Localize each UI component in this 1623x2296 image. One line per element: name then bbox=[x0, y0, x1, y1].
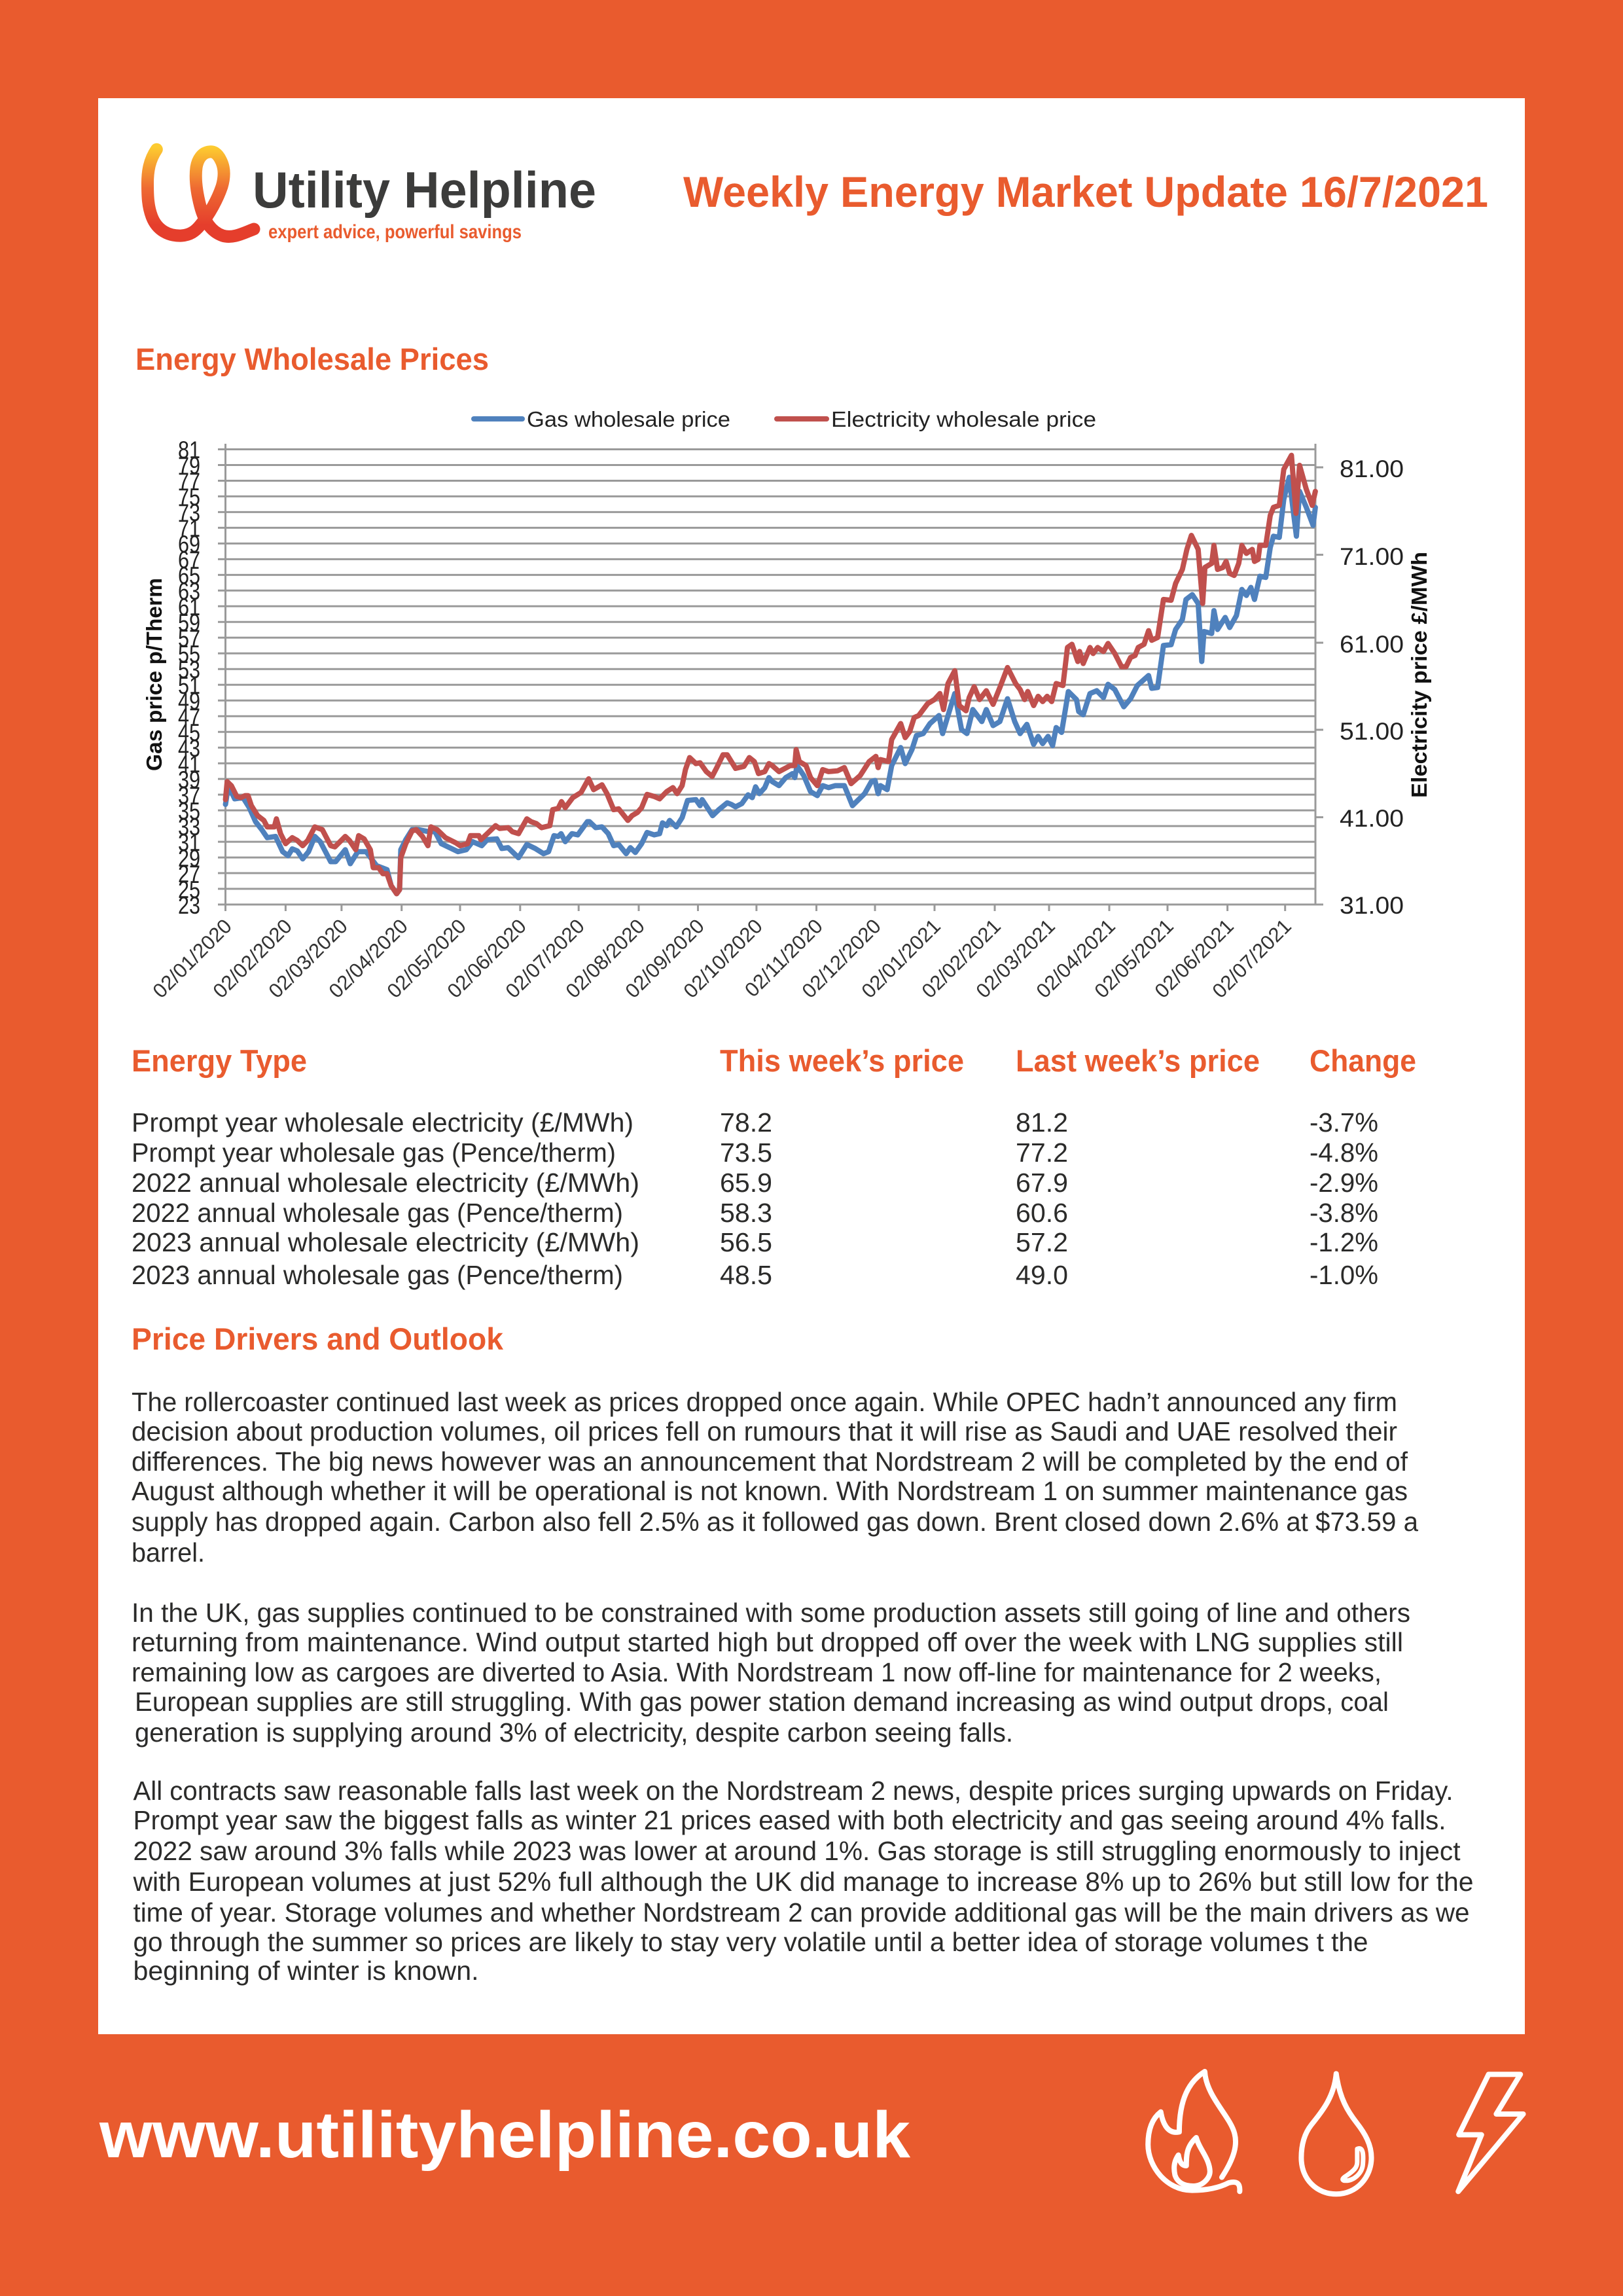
left axis labels: 47 bbox=[178, 704, 200, 730]
heading: Price Drivers and Outlook: Price Drivers and Outlook bbox=[132, 1321, 504, 1356]
row: 2023 gas: -1.0% bbox=[1310, 1260, 1378, 1290]
left axis labels: 53 bbox=[178, 656, 200, 683]
date axis labels: 02/01/2021 bbox=[857, 914, 945, 1003]
left axis labels: 57 bbox=[178, 625, 200, 652]
left axis labels: 45 bbox=[178, 719, 200, 746]
paragraph 1 bbox=[132, 1387, 1418, 1568]
logo tagline: expert advice, powerful savings bbox=[268, 221, 522, 243]
row: prompt year electricity: Prompt year wholesale electricity (£/MWh) bbox=[132, 1107, 633, 1138]
date axis labels: 02/06/2021 bbox=[1150, 914, 1238, 1003]
row: 2023 electricity: -1.2% bbox=[1310, 1227, 1378, 1257]
left axis labels: 67 bbox=[178, 547, 200, 573]
paragraph 3: 2022 saw around 3% falls while 2023 was lower at around 1%. Gas storage is still struggling enormously to inject bbox=[134, 1836, 1461, 1866]
date axis labels: 02/06/2020 bbox=[442, 914, 531, 1003]
left axis labels: 75 bbox=[178, 484, 200, 511]
paragraph 1: supply has dropped again. Carbon also fell 2.5% as it followed gas down. Brent closed down 2.6% at $73.59 a bbox=[132, 1507, 1418, 1537]
date axis labels: 02/08/2020 bbox=[561, 914, 649, 1003]
date axis labels: 02/10/2020 bbox=[679, 914, 767, 1003]
left axis labels: 63 bbox=[178, 578, 200, 605]
left axis labels: 23 bbox=[178, 892, 200, 919]
date axis labels: 02/04/2021 bbox=[1031, 914, 1120, 1003]
row: 2022 gas: 60.6 bbox=[1016, 1198, 1068, 1228]
date axis labels: 02/02/2021 bbox=[917, 914, 1005, 1003]
right axis labels: 41.00 bbox=[1340, 805, 1404, 832]
paragraph 2: returning from maintenance. Wind output started high but dropped off over the week with LNG supplies still bbox=[132, 1627, 1403, 1657]
row: 2022 gas: -3.8% bbox=[1310, 1198, 1378, 1228]
left axis labels: 39 bbox=[178, 766, 200, 793]
date axis labels: 02/11/2020 bbox=[740, 914, 827, 1001]
date axis labels: 02/12/2020 bbox=[797, 914, 885, 1003]
left axis labels: 51 bbox=[178, 672, 200, 699]
paragraph 1: differences. The big news however was an announcement that Nordstream 2 will be completed by the end of bbox=[132, 1446, 1408, 1477]
row: prompt year gas: 73.5 bbox=[720, 1138, 772, 1168]
row: prompt year electricity: 78.2 bbox=[720, 1107, 772, 1138]
left axis labels: 41 bbox=[178, 751, 200, 778]
row: prompt year gas: Prompt year wholesale gas (Pence/therm) bbox=[132, 1138, 616, 1168]
row: prompt year gas bbox=[132, 1138, 1378, 1168]
table header: Last week’s price bbox=[1016, 1043, 1260, 1078]
right axis labels: 31.00 bbox=[1340, 892, 1404, 919]
legend: electricity: Electricity wholesale price bbox=[831, 407, 1096, 431]
legend bbox=[474, 407, 1096, 431]
right axis labels: 51.00 bbox=[1340, 718, 1404, 745]
date axis labels: 02/05/2020 bbox=[382, 914, 471, 1003]
left axis labels: 65 bbox=[178, 562, 200, 589]
row: 2022 gas: 58.3 bbox=[720, 1198, 772, 1228]
paragraph 3 bbox=[133, 1776, 1473, 1986]
right axis labels bbox=[1340, 456, 1404, 919]
row: 2022 gas: 2022 annual wholesale gas (Pence/therm) bbox=[132, 1198, 623, 1228]
logo: Utility Helpline bbox=[148, 149, 596, 243]
paragraph 2: remaining low as cargoes are diverted to Asia. With Nordstream 1 now off-line for maintenance for 2 weeks, bbox=[132, 1657, 1382, 1687]
row: prompt year electricity: 81.2 bbox=[1016, 1107, 1068, 1138]
left axis labels: 27 bbox=[178, 861, 200, 888]
left axis labels: 77 bbox=[178, 468, 200, 495]
white content panel bbox=[98, 98, 1525, 2034]
date axis labels: 02/05/2021 bbox=[1090, 914, 1178, 1003]
row: prompt year gas: -4.8% bbox=[1310, 1138, 1378, 1168]
heading: Energy Wholesale Prices: Energy Wholesale Prices bbox=[135, 342, 489, 376]
right axis title: Electricity price £/MWh bbox=[1407, 552, 1431, 798]
left axis labels bbox=[178, 437, 200, 919]
paragraph 3: time of year. Storage volumes and whether Nordstream 2 can provide additional gas will be the main drivers as we bbox=[134, 1897, 1470, 1928]
left axis labels: 37 bbox=[178, 782, 200, 809]
table header: Energy Type bbox=[132, 1043, 307, 1078]
left axis labels: 81 bbox=[178, 437, 200, 463]
row: 2022 electricity: 65.9 bbox=[720, 1168, 772, 1198]
date axis labels: 02/07/2020 bbox=[501, 914, 589, 1003]
left axis labels: 55 bbox=[178, 641, 200, 668]
left axis labels: 33 bbox=[178, 814, 200, 840]
row: 2022 electricity: -2.9% bbox=[1310, 1168, 1378, 1198]
paragraph 2: In the UK, gas supplies continued to be constrained with some production assets still going of line and others bbox=[132, 1598, 1410, 1628]
line chart: gas and electricity wholesale prices bbox=[142, 407, 1431, 1003]
row: 2023 gas: 49.0 bbox=[1016, 1260, 1068, 1290]
row: prompt year gas: 77.2 bbox=[1016, 1138, 1068, 1168]
left axis labels: 49 bbox=[178, 688, 200, 715]
footer icons bbox=[1148, 2072, 1524, 2194]
right axis labels: 71.00 bbox=[1340, 543, 1404, 570]
left axis labels: 43 bbox=[178, 735, 200, 762]
price table bbox=[132, 1043, 1416, 1290]
row: 2022 electricity bbox=[132, 1168, 1378, 1198]
icon: water drop bbox=[1301, 2073, 1372, 2194]
row: prompt year electricity: -3.7% bbox=[1310, 1107, 1378, 1138]
row: 2023 gas bbox=[132, 1260, 1378, 1290]
date axis labels: 02/07/2021 bbox=[1207, 914, 1296, 1003]
left axis labels: 25 bbox=[178, 876, 200, 903]
logo wordmark: Utility Helpline bbox=[253, 161, 596, 219]
left axis labels: 31 bbox=[178, 829, 200, 856]
paragraph 3: beginning of winter is known. bbox=[134, 1956, 479, 1986]
row: 2023 electricity: 2023 annual wholesale electricity (£/MWh) bbox=[132, 1227, 639, 1257]
date axis labels: 02/02/2020 bbox=[208, 914, 296, 1003]
paragraph 3: with European volumes at just 52% full although the UK did manage to increase 8% up to 26% but still low for the bbox=[133, 1867, 1473, 1897]
paragraph 1: barrel. bbox=[132, 1537, 205, 1568]
left axis labels: 79 bbox=[178, 452, 200, 479]
row: 2022 electricity: 67.9 bbox=[1016, 1168, 1068, 1198]
date axis labels: 02/01/2020 bbox=[148, 914, 236, 1003]
left axis labels: 69 bbox=[178, 531, 200, 558]
paragraph 3: go through the summer so prices are likely to stay very volatile until a better idea of storage volumes t the bbox=[134, 1927, 1368, 1957]
left axis labels: 73 bbox=[178, 499, 200, 526]
right axis labels: 61.00 bbox=[1340, 631, 1404, 658]
row: prompt year electricity bbox=[132, 1107, 1378, 1138]
electricity price line bbox=[226, 456, 1315, 893]
date axis labels: 02/09/2020 bbox=[620, 914, 709, 1003]
paragraph 2: generation is supplying around 3% of electricity, despite carbon seeing falls. bbox=[135, 1717, 1013, 1748]
paragraph 2 bbox=[132, 1598, 1410, 1748]
paragraph 3: Prompt year saw the biggest falls as winter 21 prices eased with both electricity and gas seeing around 4% falls. bbox=[134, 1805, 1446, 1835]
row: 2022 gas bbox=[132, 1198, 1378, 1228]
icon: lightning bolt bbox=[1458, 2074, 1524, 2191]
left axis labels: 35 bbox=[178, 798, 200, 825]
row: 2022 electricity: 2022 annual wholesale electricity (£/MWh) bbox=[132, 1168, 639, 1198]
right axis labels: 81.00 bbox=[1340, 456, 1404, 482]
row: 2023 gas: 2023 annual wholesale gas (Pence/therm) bbox=[132, 1260, 623, 1290]
date axis labels: 02/03/2021 bbox=[971, 914, 1060, 1003]
table header: This week’s price bbox=[720, 1043, 964, 1078]
row: 2023 electricity: 56.5 bbox=[720, 1227, 772, 1257]
date axis labels: 02/04/2020 bbox=[324, 914, 412, 1003]
date axis labels bbox=[148, 914, 1296, 1003]
title: Weekly Energy Market Update 16/7/2021 bbox=[683, 168, 1488, 216]
paragraph 1: The rollercoaster continued last week as prices dropped once again. While OPEC hadn’t announced any firm bbox=[132, 1387, 1397, 1417]
paragraph 1: decision about production volumes, oil prices fell on rumours that it will rise as Saudi and UAE resolved their bbox=[132, 1416, 1397, 1446]
left axis labels: 59 bbox=[178, 609, 200, 636]
row: 2023 electricity bbox=[132, 1227, 1378, 1257]
footer website URL: www.utilityhelpline.co.uk bbox=[99, 2098, 910, 2172]
left axis title: Gas price p/Therm bbox=[142, 578, 166, 771]
left axis labels: 29 bbox=[178, 845, 200, 872]
row: 2023 gas: 48.5 bbox=[720, 1260, 772, 1290]
paragraph 2: European supplies are still struggling. With gas power station demand increasing as wind output drops, coal bbox=[135, 1687, 1389, 1717]
left axis labels: 61 bbox=[178, 594, 200, 620]
paragraph 3: All contracts saw reasonable falls last week on the Nordstream 2 news, despite prices surging upwards on Friday. bbox=[134, 1776, 1453, 1806]
date axis labels: 02/03/2020 bbox=[264, 914, 352, 1003]
table header bbox=[132, 1043, 1416, 1078]
logo swoosh icon bbox=[148, 149, 254, 236]
legend: gas: Gas wholesale price bbox=[527, 407, 730, 431]
paragraph 1: August although whether it will be operational is not known. With Nordstream 1 on summer maintenance gas bbox=[132, 1476, 1408, 1506]
row: 2023 electricity: 57.2 bbox=[1016, 1227, 1068, 1257]
icon: flame bbox=[1148, 2072, 1240, 2191]
gas price line bbox=[226, 477, 1315, 893]
left axis labels: 71 bbox=[178, 515, 200, 542]
table header: Change bbox=[1310, 1043, 1416, 1078]
